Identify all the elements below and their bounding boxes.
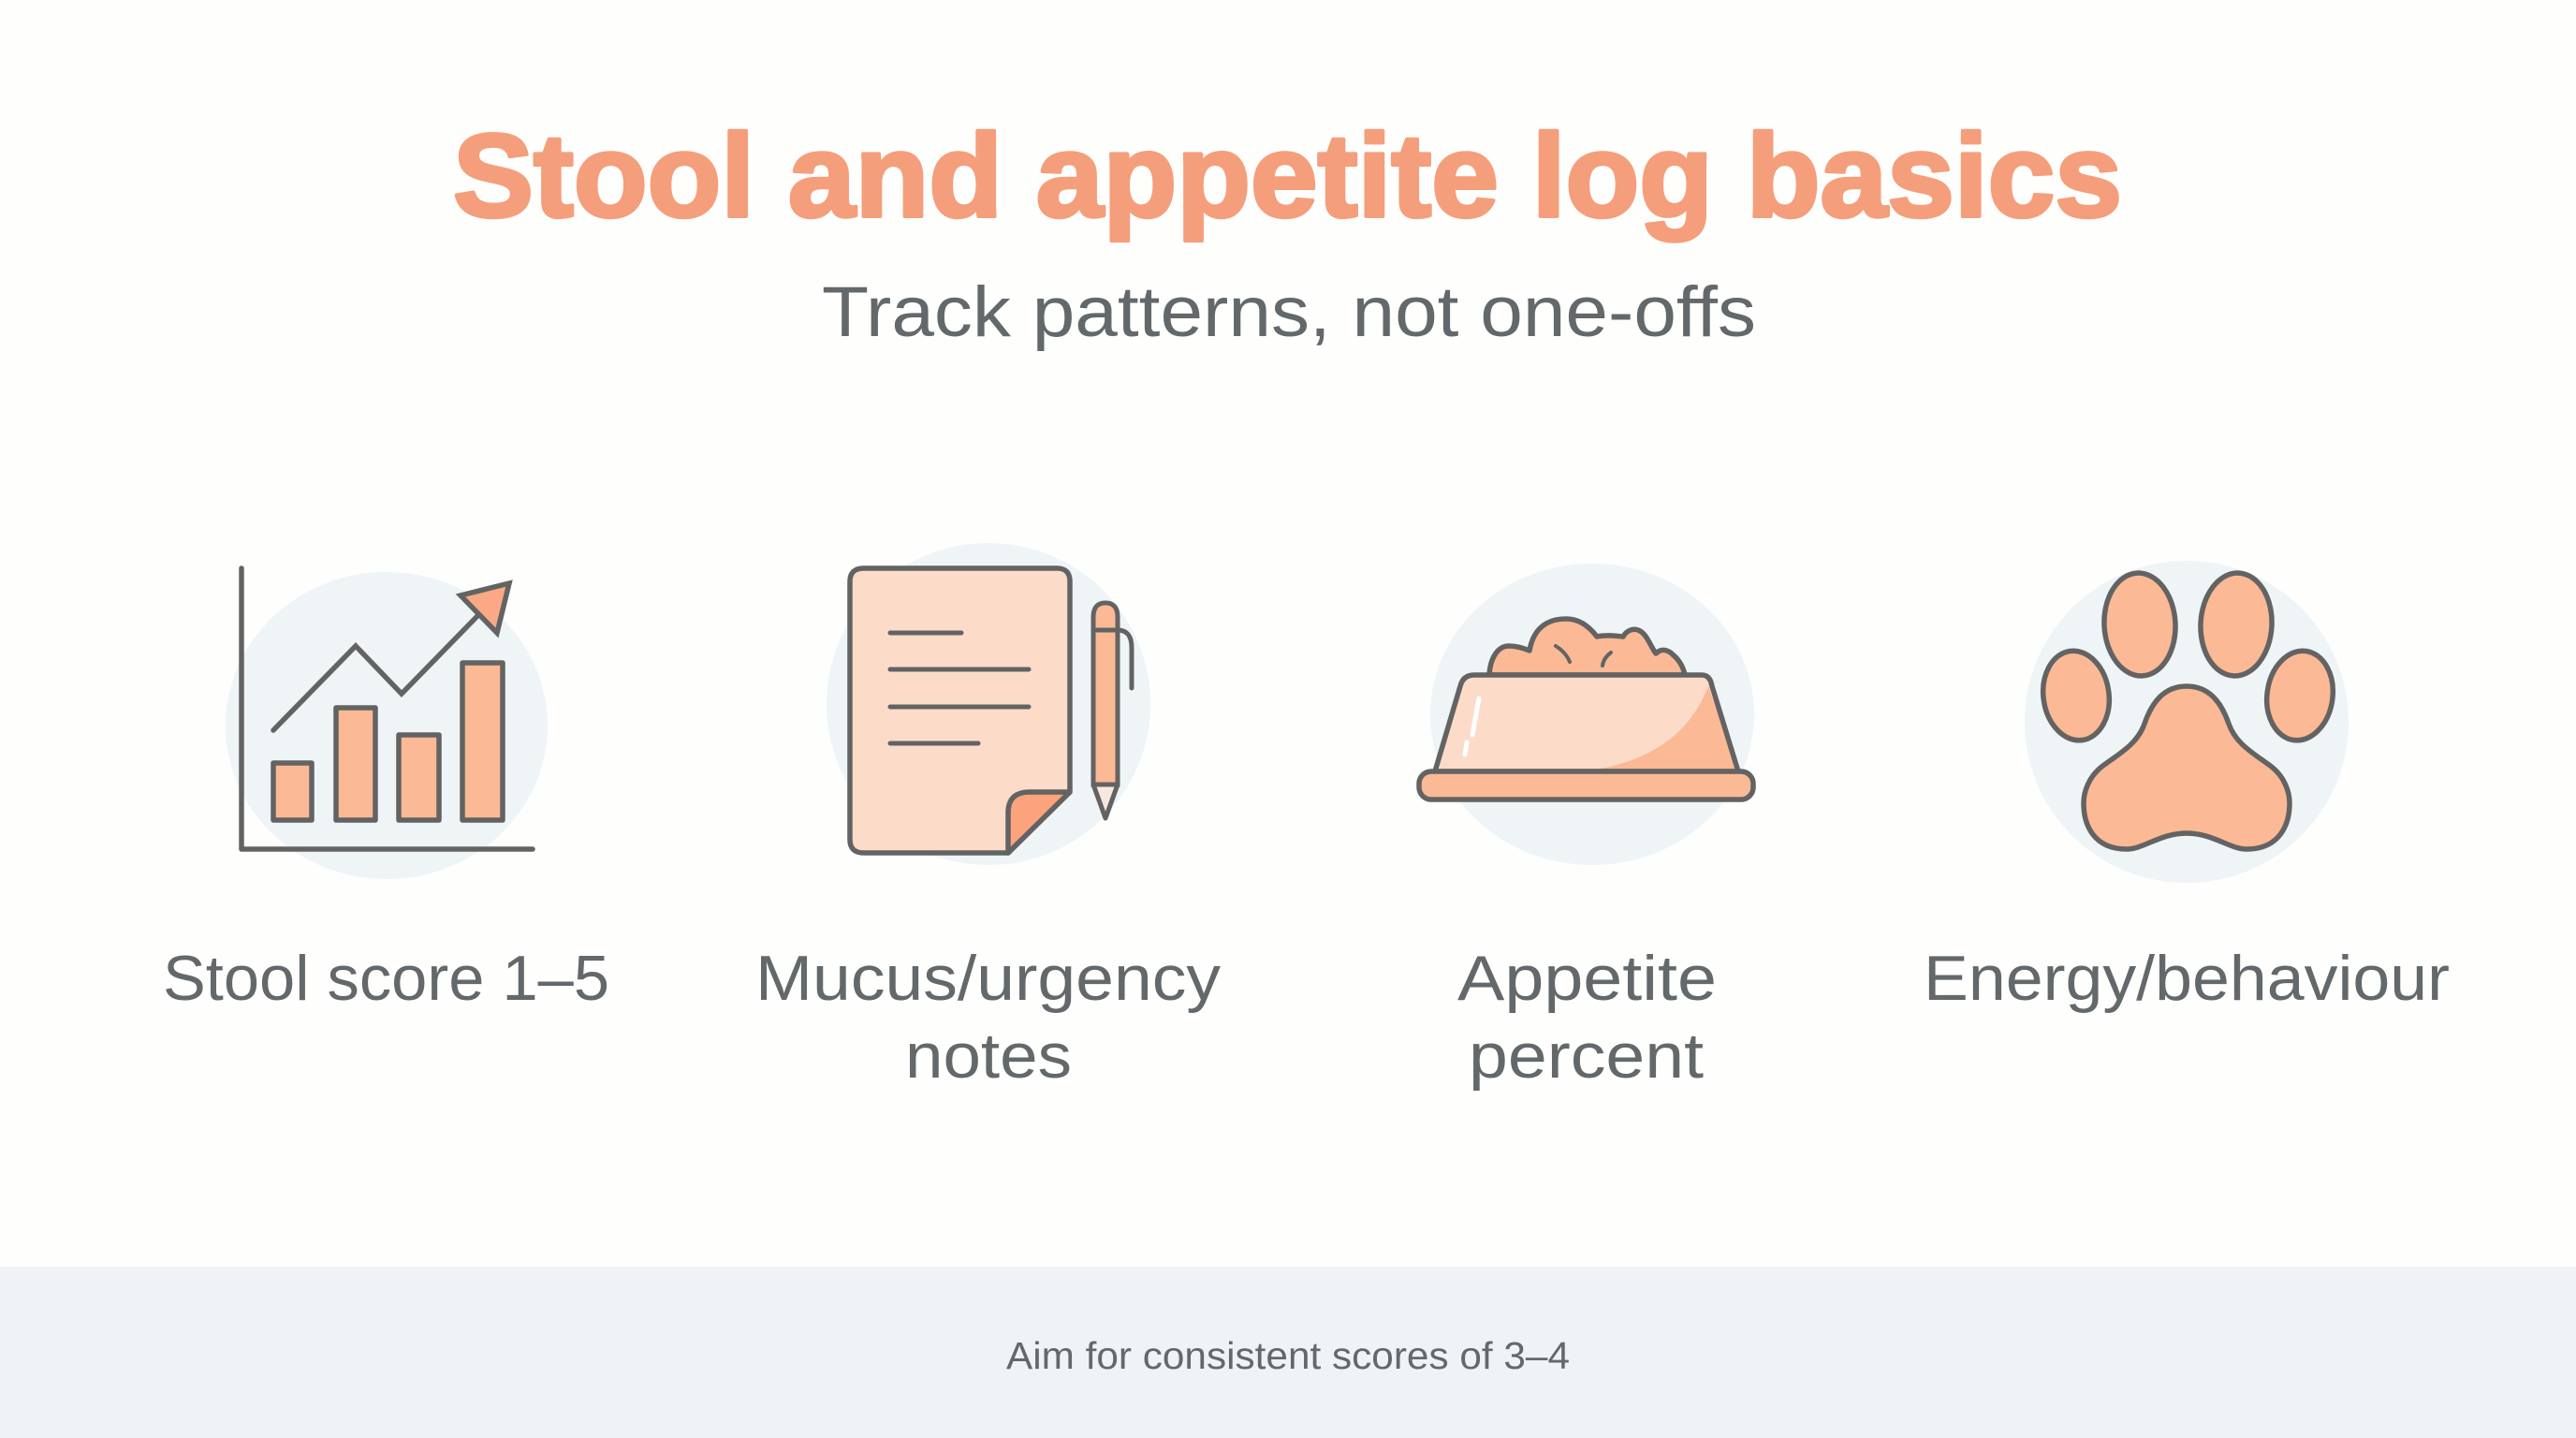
label: mucus/urgency notes	[755, 943, 1221, 1092]
label: appetite percent: percent	[1469, 1020, 1704, 1092]
label: appetite percent	[1457, 943, 1717, 1092]
label: stool score: Stool score 1–5	[163, 943, 609, 1014]
icon: notes document and pen	[827, 543, 1150, 865]
subtitle: Track patterns, not one-offs	[822, 272, 1756, 352]
label: mucus/urgency notes: Mucus/urgency	[755, 943, 1221, 1014]
icon: food bowl	[1419, 564, 1754, 865]
label: mucus/urgency notes: notes	[905, 1020, 1072, 1092]
title: Stool and appetite log basics	[453, 110, 2122, 242]
footer band	[0, 1267, 2576, 1438]
label: energy/behaviour: Energy/behaviour	[1924, 943, 2450, 1014]
footer note: Aim for consistent scores of 3–4	[1006, 1334, 1570, 1377]
icon: paw print	[2025, 561, 2349, 883]
icon: stool score bar chart	[226, 568, 548, 879]
label: appetite percent: Appetite	[1457, 943, 1717, 1014]
